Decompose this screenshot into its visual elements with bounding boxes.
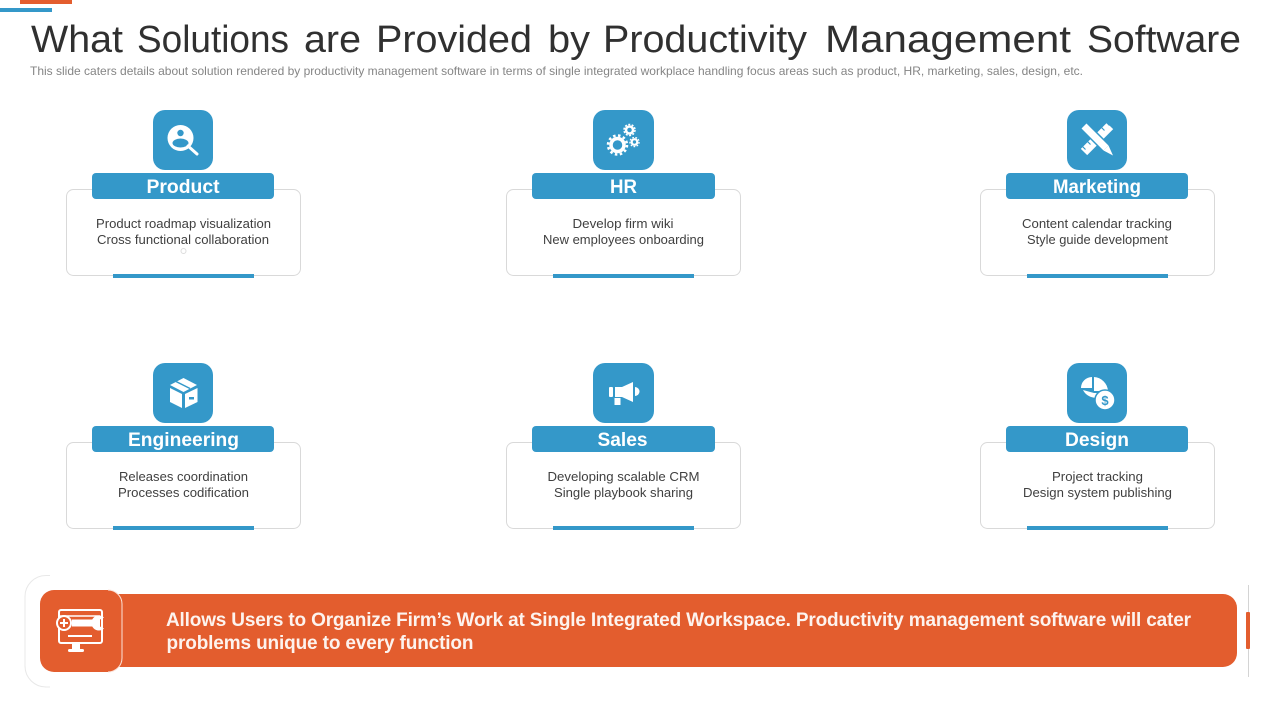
text: Cross functional collaboration <box>97 233 269 247</box>
text: Single playbook sharing <box>554 486 693 500</box>
callout <box>25 576 1250 687</box>
card body <box>980 442 1214 528</box>
panel: design <box>980 363 1214 530</box>
callout text <box>166 610 1192 654</box>
card body <box>506 442 740 528</box>
heading: Marketing <box>1053 177 1141 198</box>
heading: Product <box>146 177 220 198</box>
title: are <box>304 19 361 61</box>
callout bar <box>100 594 1237 667</box>
panel: HR <box>506 110 740 278</box>
icon: pencil and ruler <box>1067 110 1127 170</box>
title: Provided <box>376 19 532 61</box>
right bracket <box>1246 585 1250 677</box>
card body <box>66 442 300 528</box>
subtitle: This slide caters details about solution rendered by productivity management software in terms of single integrated workplace handling focus areas such as product, HR, marketing, sales, design, etc. <box>30 64 1083 78</box>
card body <box>506 190 740 276</box>
callout frame <box>25 576 50 687</box>
text <box>548 470 700 500</box>
small mark <box>181 248 186 254</box>
heading: Design <box>1065 430 1129 451</box>
accent underline <box>113 526 254 530</box>
heading: Engineering <box>128 430 239 451</box>
text: Design system publishing <box>1023 486 1172 500</box>
accent underline <box>1027 526 1168 530</box>
callout text: problems unique to every function <box>166 633 474 654</box>
title: Productivity <box>603 19 807 61</box>
heading: HR <box>610 177 637 198</box>
text: Processes codification <box>118 486 249 500</box>
icon: megaphone <box>593 363 654 423</box>
icon: box <box>153 363 213 423</box>
text: Develop firm wiki <box>572 217 674 231</box>
accent bars <box>0 0 72 12</box>
title: by <box>548 19 590 61</box>
text: Content calendar tracking <box>1022 217 1172 231</box>
text: Product roadmap visualization <box>96 217 271 231</box>
text <box>1023 470 1172 500</box>
card body <box>66 190 300 276</box>
heading <box>532 426 715 452</box>
card body <box>980 190 1214 276</box>
heading <box>1006 426 1188 452</box>
text <box>96 217 271 247</box>
heading <box>1006 173 1188 199</box>
icon: person search <box>153 110 213 170</box>
accent underline <box>113 274 254 278</box>
panel: product <box>66 110 300 278</box>
icon: pie chart and dollar: $ <box>1101 393 1109 408</box>
panel: marketing <box>980 110 1214 278</box>
icon: monitor with wrench <box>40 590 122 672</box>
text <box>543 217 704 247</box>
callout text: Allows Users to Organize Firm’s Work at Single Integrated Workspace. Productivity management software will cater <box>166 610 1192 631</box>
text: Project tracking <box>1052 470 1143 484</box>
title: Management <box>825 19 1071 61</box>
text: New employees onboarding <box>543 233 704 247</box>
panel: sales <box>506 363 740 530</box>
heading: Sales <box>598 430 648 451</box>
heading <box>92 173 274 199</box>
text <box>1022 217 1172 247</box>
text <box>118 470 249 500</box>
icon: pie chart and dollar <box>1067 363 1127 423</box>
text: Releases coordination <box>119 470 248 484</box>
heading <box>92 426 274 452</box>
heading <box>532 173 715 199</box>
accent underline <box>553 274 694 278</box>
text: Style guide development <box>1027 233 1169 247</box>
panel: engineering <box>66 363 300 530</box>
title: Solutions <box>137 19 289 61</box>
accent underline <box>1027 274 1168 278</box>
title: Software <box>1087 19 1241 61</box>
icon: gears <box>593 110 654 170</box>
accent underline <box>553 526 694 530</box>
text: Developing scalable CRM <box>548 470 700 484</box>
title: What <box>31 19 123 61</box>
